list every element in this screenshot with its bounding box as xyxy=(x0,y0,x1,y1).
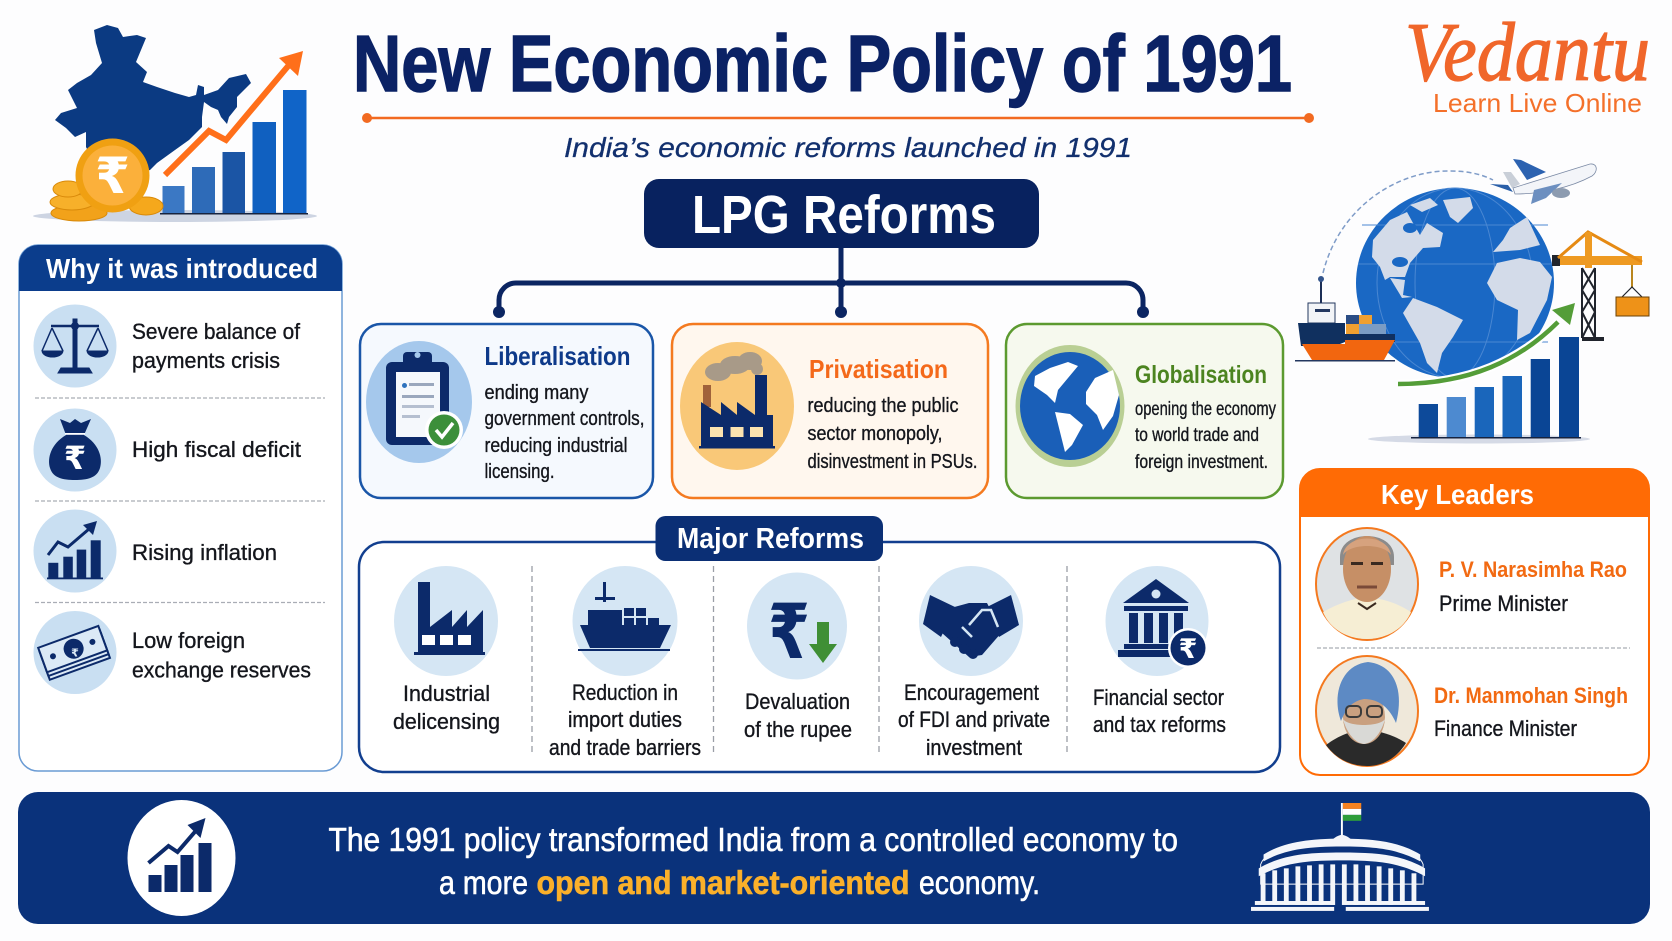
icon: balance scale xyxy=(34,304,116,388)
reform: financial sector and tax: and tax reforms xyxy=(1093,712,1226,737)
icon: coins xyxy=(50,138,163,221)
logo: Vedantu: Vedantu xyxy=(1405,6,1650,99)
portrait: P. V. Narasimha Rao xyxy=(1316,528,1418,640)
card text xyxy=(1135,399,1276,473)
reform: industrial delicensing: delicensing xyxy=(393,709,500,734)
panel: Liberalisation xyxy=(360,324,653,498)
reform: import duties xyxy=(549,566,701,760)
card text xyxy=(808,395,978,473)
icon: growth chart in circle xyxy=(128,800,236,916)
panel: Privatisation xyxy=(672,324,988,498)
reform: import duties: and trade barriers xyxy=(549,735,701,760)
icon: clipboard with check xyxy=(366,341,472,463)
heading: LPG Reforms: LPG Reforms xyxy=(692,185,996,245)
reform: import duties: Reduction in xyxy=(572,680,678,705)
text: balance of payments: Severe balance of xyxy=(132,319,301,344)
card text: opening the economy xyxy=(1135,399,1276,420)
icon: India map xyxy=(55,25,251,180)
heading badge xyxy=(656,516,883,561)
reform: industrial delicensing: Industrial xyxy=(403,681,490,706)
reform: financial sector and tax xyxy=(1093,566,1226,737)
panel: Key Leaders xyxy=(1300,469,1649,775)
reform: financial sector and tax: ₹ xyxy=(1179,634,1197,664)
heading badge: Major Reforms xyxy=(677,523,864,555)
reform: FDI and private investment: of FDI and private xyxy=(898,707,1050,732)
arrow: orange growth xyxy=(165,51,303,175)
icon: globe xyxy=(1356,188,1554,378)
icon: banknotes xyxy=(34,611,116,694)
reform: devaluation of the rupee xyxy=(744,572,852,742)
text: fiscal deficit: High fiscal deficit xyxy=(132,437,302,462)
portrait: Dr. Manmohan Singh xyxy=(1316,656,1418,766)
reform: devaluation of the rupee: of the rupee xyxy=(744,717,852,742)
logo tagline: Learn Live Online xyxy=(1433,88,1642,118)
banner text: open and market-oriented xyxy=(536,864,910,901)
illustration: globe, trade and growth xyxy=(1295,159,1649,444)
reform: devaluation of the rupee: Devaluation xyxy=(745,689,850,714)
reform: devaluation of the rupee: ₹ xyxy=(768,590,810,675)
panel: why it was introduced xyxy=(19,245,342,771)
card text: reducing the public xyxy=(808,395,958,417)
chart: globalisation bars xyxy=(1411,337,1581,438)
card text: government controls, xyxy=(484,408,644,430)
banner text xyxy=(328,821,1178,901)
subtitle: India’s economic reforms launched in 1991 xyxy=(564,132,1132,163)
icon: rising chart xyxy=(34,510,116,592)
icon: ship xyxy=(1295,276,1395,362)
icon: banknotes: ₹ xyxy=(71,648,79,660)
title: New Economic Policy of 1991 xyxy=(353,19,1292,108)
icon: crane xyxy=(1552,232,1649,341)
reform: industrial delicensing xyxy=(393,566,500,734)
text: foreign exchange: Low foreign xyxy=(132,628,245,653)
card text: licensing. xyxy=(484,461,554,483)
text: rising inflation: Rising inflation xyxy=(132,540,277,565)
icon: globe xyxy=(1016,345,1124,467)
card text: disinvestment in PSUs. xyxy=(808,451,978,473)
leader name: Dr. Manmohan Singh xyxy=(1434,683,1628,708)
card text: ending many xyxy=(484,382,588,404)
banner text: a more xyxy=(439,864,528,901)
reform: FDI and private investment: Encouragement xyxy=(904,680,1039,705)
banner: conclusion xyxy=(18,792,1650,924)
text: foreign exchange: exchange reserves xyxy=(132,658,311,682)
text: balance of payments xyxy=(132,319,301,373)
card text xyxy=(484,382,644,483)
reform: import duties: import duties xyxy=(568,707,682,732)
card title: Liberalisation xyxy=(484,341,630,371)
leader role: Prime Minister xyxy=(1439,591,1568,616)
panel: Major Reforms xyxy=(359,516,1280,772)
dashed flight path xyxy=(1323,171,1493,273)
text: foreign exchange xyxy=(132,628,311,682)
card text: to world trade and xyxy=(1135,425,1259,446)
chart: rising bars xyxy=(160,90,308,214)
reform: financial sector and tax: Financial sector xyxy=(1093,685,1224,710)
connector: LPG tree xyxy=(493,248,1149,318)
illustration: India map with rupee coins and growth chart xyxy=(33,25,317,222)
icon: airplane xyxy=(1490,159,1596,204)
arrow: green growth xyxy=(1398,303,1575,384)
icon: parliament with flag xyxy=(1251,803,1429,911)
panel heading: Why it was introduced xyxy=(46,253,318,284)
panel: Globalisation xyxy=(1006,324,1283,498)
card title: Privatisation xyxy=(809,354,948,384)
panel heading: Key Leaders xyxy=(1381,479,1534,510)
leader name: P. V. Narasimha Rao xyxy=(1439,557,1627,582)
card title: Globalisation xyxy=(1135,361,1267,389)
reform: FDI and private investment: investment xyxy=(926,735,1022,760)
card text: reducing industrial xyxy=(484,435,628,457)
reform: FDI and private investment xyxy=(898,566,1050,760)
icon: coins: ₹ xyxy=(95,148,130,204)
card text: sector monopoly, xyxy=(808,423,942,445)
icon: factory with smoke xyxy=(680,342,794,470)
title underline xyxy=(362,113,1314,123)
card text: foreign investment. xyxy=(1135,452,1268,473)
text: balance of payments: payments crisis xyxy=(132,348,280,373)
leader role: Finance Minister xyxy=(1434,716,1577,741)
icon: money bag xyxy=(34,408,116,492)
icon: money bag: ₹ xyxy=(64,440,86,476)
banner text: The 1991 policy transformed India from a controlled economy to xyxy=(328,821,1178,858)
banner text: economy. xyxy=(919,864,1040,901)
